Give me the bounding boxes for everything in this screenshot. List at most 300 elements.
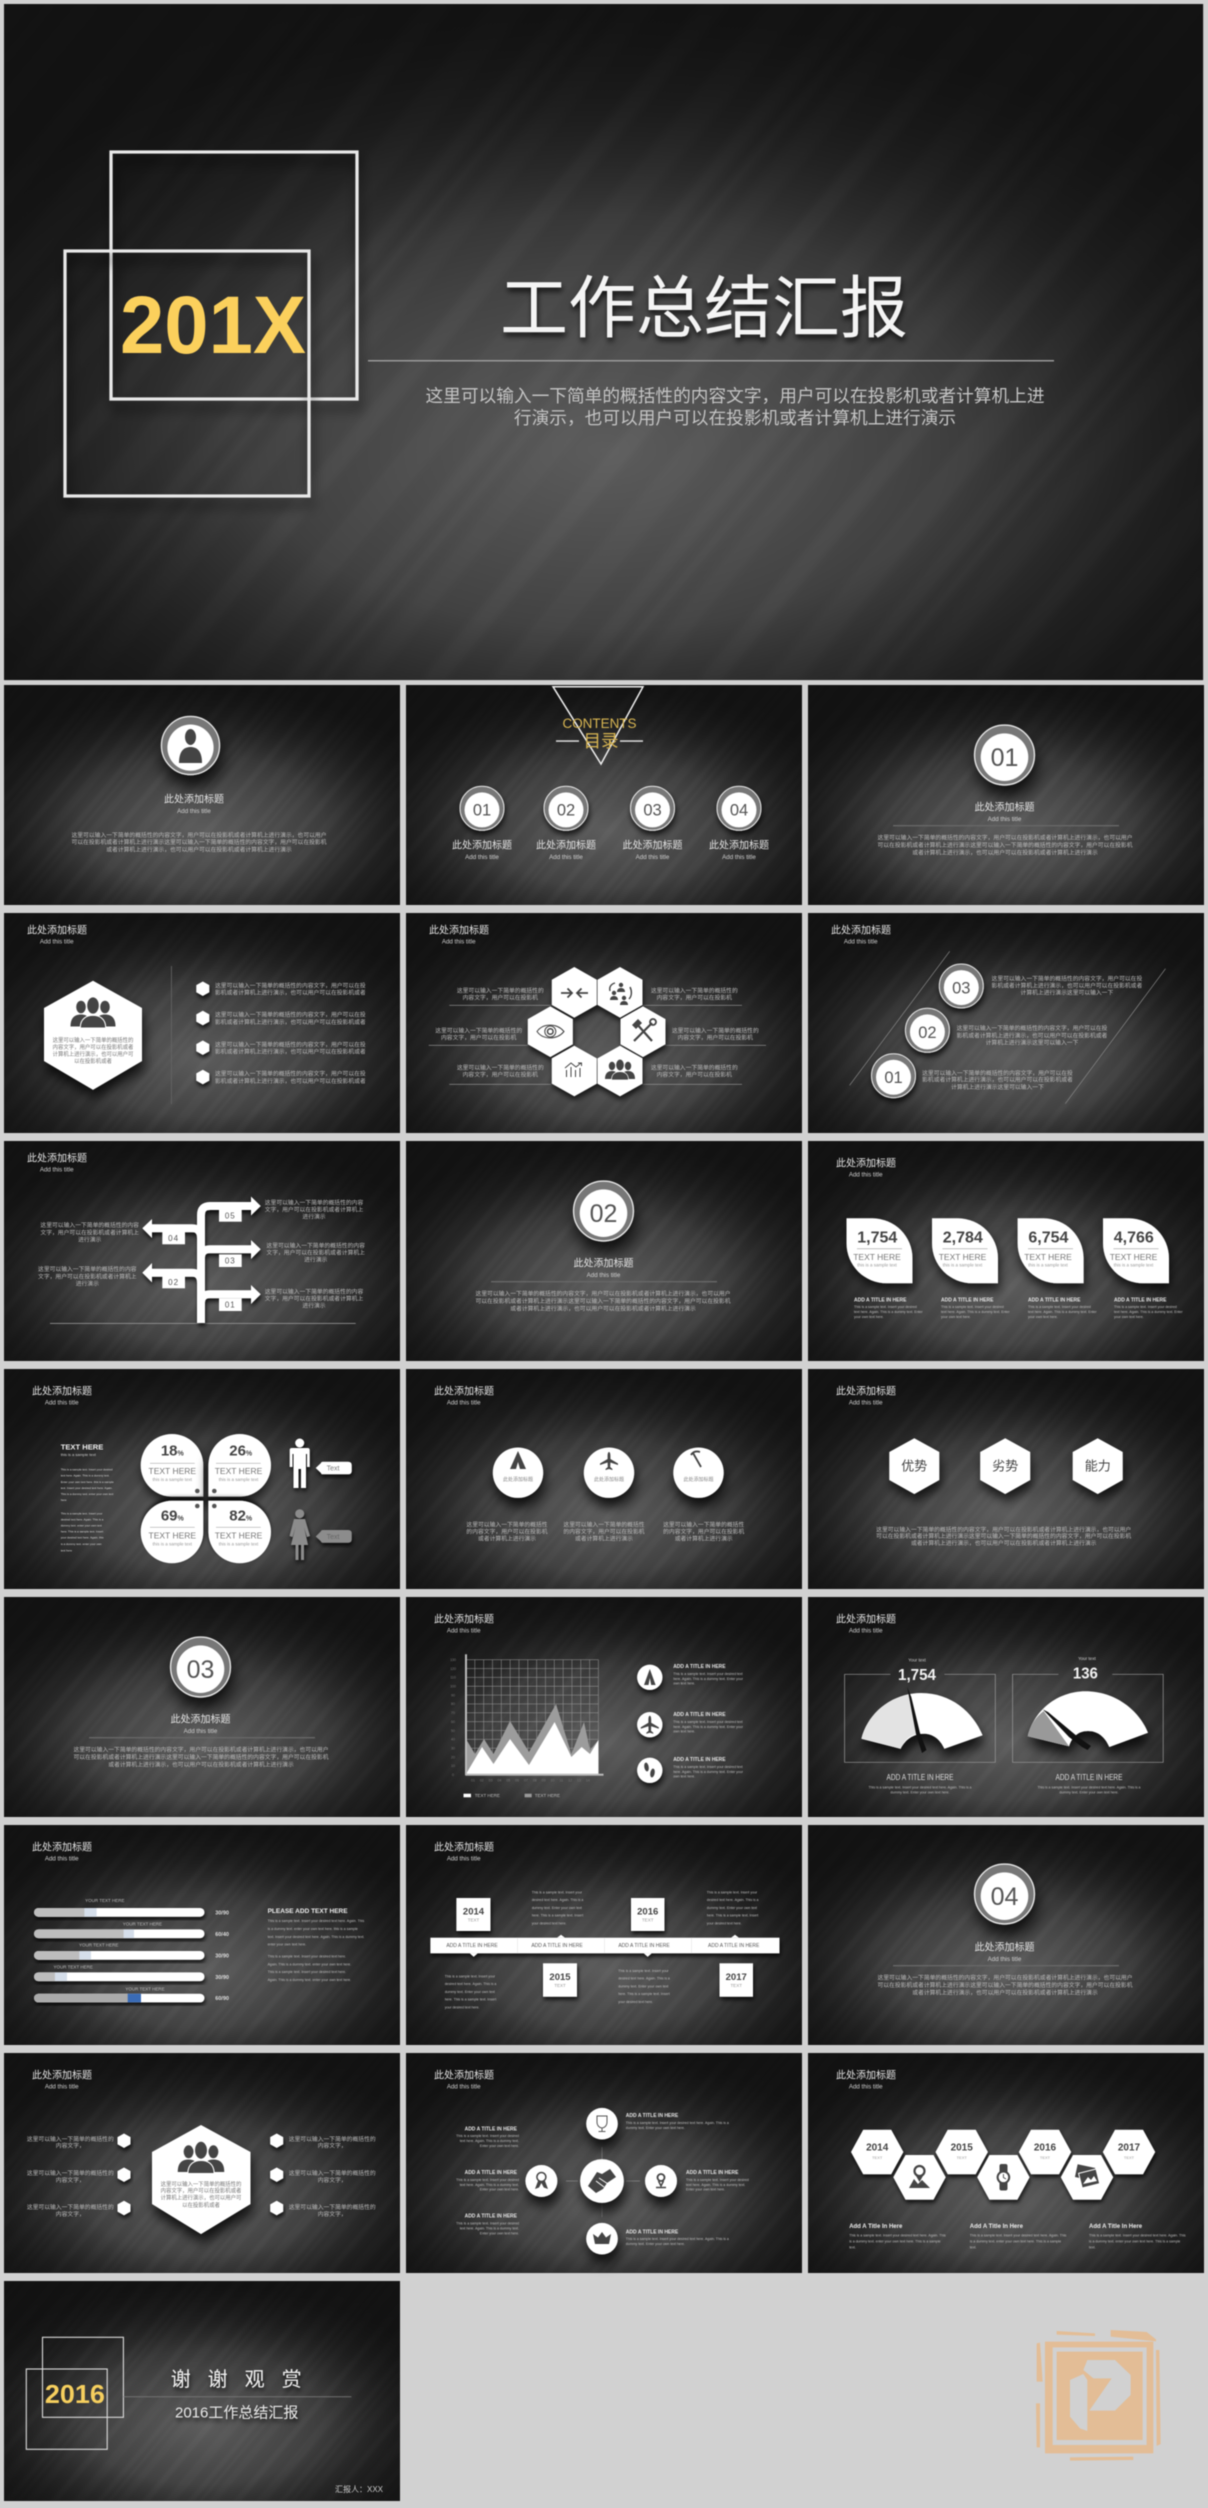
- callout lines: [429, 1005, 766, 1084]
- area chart: 120: [450, 1667, 456, 1671]
- central hexagon: 内容文字，用户可以在投影机或者: [161, 2187, 242, 2195]
- item: plane: [637, 1712, 744, 1737]
- heading: Add this title: [587, 1272, 621, 1279]
- paragraph above segment 4: your desired text here.: [707, 1922, 742, 1926]
- diagonal lines: [850, 951, 1166, 1104]
- area chart: 90: [451, 1693, 455, 1697]
- area chart: 11: [559, 1778, 563, 1782]
- gauge 2 readings: dummy text. Enter your own text here.: [1059, 1790, 1119, 1794]
- body text: 可以在投影机或者计算机上进行演示这里可以输入一下简单的概括性的内容文字，用户可以在投影机: [877, 841, 1133, 849]
- captions: This is a sample text. Insert your desired: [941, 1305, 1004, 1309]
- bar 1: [34, 1898, 229, 1917]
- hexagon 2016: 2016: [1034, 2142, 1057, 2154]
- body text: 或者计算机上进行演示，也可以用户可以在投影机或者计算机上进行演示: [106, 846, 292, 854]
- background: [4, 1141, 400, 1361]
- rule: [491, 1281, 717, 1282]
- petal 69%: 69%: [161, 1508, 185, 1524]
- item 02: [536, 786, 596, 861]
- text left lower: This is a sample text. Insert your desired: [456, 2221, 519, 2225]
- bubble: woman: Text: [327, 1534, 339, 1541]
- text 03: [266, 1242, 365, 1264]
- point 4: [196, 1070, 366, 1085]
- stat 4766: TEXT HERE: [1110, 1252, 1158, 1262]
- petal 26%: [208, 1434, 271, 1497]
- heading: Add this title: [849, 2084, 883, 2090]
- stat 6754: TEXT HERE: [1024, 1252, 1072, 1262]
- captions: ADD A TITLE IN HERE: [1028, 1298, 1081, 1304]
- hexagon 2014: 2014: [866, 2142, 889, 2154]
- background: [406, 913, 802, 1133]
- text columns: 或者计算机上进行演示: [675, 1535, 733, 1543]
- left text: dummy text. enter your own text: [61, 1524, 102, 1528]
- icon: people: [605, 1059, 635, 1080]
- label 04: [162, 1232, 185, 1244]
- item 02: 02: [557, 802, 575, 820]
- card 2016: TEXT: [642, 1918, 654, 1922]
- text 04: 这里可以输入一下简单的概括性的内容: [40, 1221, 139, 1229]
- circle: plane: [584, 1448, 634, 1498]
- area chart: 80: [451, 1702, 455, 1706]
- slide: timeline: [406, 1825, 802, 2045]
- chart legend: TEXT HERE: [475, 1793, 500, 1798]
- avatar ring: [161, 716, 220, 775]
- gauge 2 readings: Your text: [1078, 1656, 1096, 1661]
- body text: 可以在投影机或者计算机上进行演示这里可以输入一下简单的概括性的内容文字，用户可以在投影机: [73, 1753, 329, 1761]
- item 01: [452, 786, 512, 861]
- card 2015: TEXT: [554, 1983, 566, 1988]
- stat 2784: 2,784: [943, 1230, 983, 1246]
- watermark stamp: [1036, 2330, 1161, 2461]
- paragraph below segment 1: your desired text here.: [445, 2006, 480, 2010]
- paragraph above segment 2: desired text here. Again. This is a: [532, 1898, 583, 1902]
- icon: tools: [632, 1019, 656, 1041]
- frames and year: 2016: [45, 2379, 105, 2409]
- right text: Again. This is a dummy text. enter your own text here.: [268, 1978, 351, 1982]
- left text: here: [61, 1498, 67, 1502]
- column text 2: Add A Title In Here: [970, 2224, 1024, 2230]
- bar 3: [34, 1943, 229, 1960]
- petal 82%: TEXT HERE: [215, 1531, 263, 1541]
- heading: [32, 2068, 92, 2090]
- card 2017: 2017: [726, 1972, 747, 1983]
- circle: tent: [493, 1448, 543, 1498]
- captions: your own text here.: [941, 1315, 971, 1319]
- area chart: 100: [450, 1684, 456, 1688]
- text 02: [38, 1265, 137, 1287]
- bar 4: 30/90: [215, 1975, 229, 1981]
- paragraph above segment 4: This is a sample text. Insert your: [707, 1890, 758, 1894]
- text 03: 这里可以输入一下简单的概括性的内容: [266, 1242, 365, 1250]
- stat 2784: TEXT HERE: [939, 1252, 987, 1262]
- item: tent: here. Again. This is a dummy text. Enter your: [673, 1677, 744, 1681]
- item: tent: [637, 1664, 744, 1690]
- gauge 2 readings: This is a sample text. Insert your desired text here. Again. This is a: [1037, 1785, 1141, 1789]
- item: footprints: [637, 1757, 744, 1783]
- paragraph above segment 4: [707, 1890, 759, 1926]
- icon: eye: [537, 1025, 564, 1038]
- captions: text here. Again. This is a dummy text. Enter: [1114, 1310, 1183, 1314]
- background: [808, 1369, 1204, 1589]
- heading: 此处添加标题: [164, 792, 224, 806]
- step 02: 影机或者计算机上进行演示，也可以用户可以在投影机或者: [957, 1031, 1108, 1039]
- background: [406, 2053, 802, 2273]
- hexagon: advantage: 优势: [901, 1458, 927, 1474]
- captions: This is a sample text. Insert your desired: [1028, 1305, 1091, 1309]
- number ring: [975, 1864, 1034, 1924]
- hexagon 2016: [1019, 2130, 1071, 2174]
- area chart: 03: [489, 1778, 493, 1782]
- background: [406, 1141, 802, 1361]
- stat 6754: this is a sample text: [1028, 1262, 1069, 1267]
- background: [406, 1825, 802, 2045]
- heading: [434, 1612, 494, 1634]
- heading: [434, 1840, 494, 1862]
- heading: 此处添加标题: [974, 1940, 1034, 1954]
- slide: radial hub: [406, 2053, 802, 2273]
- hexagon: map pin: [893, 2155, 946, 2200]
- right text: is a dummy text. enter your own text here. this is a sample: [268, 1927, 358, 1931]
- frames and year: 201X: [120, 280, 306, 371]
- card 2015: 2015: [549, 1972, 571, 1983]
- paragraph above segment 2: here. This is a sample text. Insert: [532, 1914, 583, 1918]
- body text: 这里可以输入一下简单的概括性的内容文字，用户可以在投影机或者计算机上进行演示，也可以用户: [73, 1745, 329, 1753]
- background: [808, 685, 1204, 905]
- body text: [475, 1289, 731, 1312]
- left text: TEXT HERE: [61, 1442, 103, 1451]
- text right: Enter your own text here.: [686, 2188, 725, 2192]
- background: [406, 685, 802, 905]
- contents heading: CONTENTS: [562, 716, 636, 731]
- heading: [974, 800, 1034, 823]
- background: [4, 1597, 400, 1817]
- point 4: 这里可以输入一下简单的概括性的内容文字，用户可以在投: [215, 1070, 366, 1078]
- right text: This is a sample text. Insert your desired text here.: [268, 1954, 346, 1958]
- area chart: 13: [577, 1778, 581, 1782]
- item 04: 04: [730, 802, 748, 820]
- hexagon: ability: [1073, 1438, 1123, 1494]
- heading: [170, 1712, 230, 1735]
- text right: ADD A TITLE IN HERE: [686, 2170, 739, 2176]
- text 05: 进行演示: [302, 1213, 326, 1221]
- background: [808, 1141, 1204, 1361]
- stat 1754: TEXT HERE: [853, 1252, 901, 1262]
- item: footprints: own text here.: [673, 1774, 695, 1778]
- hexagon: photos: [1061, 2155, 1113, 2200]
- number ring: [574, 1181, 633, 1241]
- petal 18%: this is a sample text: [153, 1477, 193, 1482]
- text left: 这里可以输入一下简单的概括性的: [27, 2203, 114, 2211]
- hexagon 2016: TEXT: [1040, 2155, 1051, 2160]
- step 02: [905, 1008, 1108, 1052]
- text columns: 的内容文字，用户可以在投影机: [563, 1528, 645, 1536]
- text left upper: text here. Again. This is a dummy text.: [460, 2139, 519, 2143]
- step 03: 03: [952, 980, 970, 998]
- cover subtitle: 这里可以输入一下简单的概括性的内容文字，用户可以在投影机或者计算机上进: [425, 386, 1045, 406]
- text 02: 文字，用户可以在投影机或者计算机上: [38, 1272, 137, 1280]
- heading: [836, 1612, 896, 1634]
- heading: Add this title: [849, 1172, 883, 1178]
- petal 69%: this is a sample text: [153, 1542, 193, 1546]
- bubble: woman: [316, 1530, 352, 1543]
- heading: 此处添加标题: [170, 1712, 230, 1726]
- text left middle: 这里可以输入一下简单的概括性的: [435, 1026, 522, 1034]
- background: [406, 1369, 802, 1589]
- area chart: 12: [568, 1778, 572, 1782]
- body text: 可以在投影机或者计算机上进行演示这里可以输入一下简单的概括性的内容文字，用户可以在投影机: [475, 1297, 731, 1305]
- bubble: man: [316, 1462, 352, 1474]
- text 04: 文字，用户可以在投影机或者计算机上: [40, 1228, 139, 1236]
- heading: [836, 2068, 896, 2090]
- hexagon 2017: 2017: [1118, 2142, 1141, 2154]
- text right bottom: [651, 1063, 738, 1078]
- label 02: 02: [168, 1278, 179, 1287]
- heading: Add this title: [45, 2084, 79, 2090]
- bar 5: [34, 1986, 229, 2002]
- reporter: 汇报人：XXX: [335, 2484, 384, 2494]
- body text: 可以在投影机或者计算机上进行演示这里可以输入一下简单的概括性的内容文字，用户可以在投影机: [876, 1532, 1131, 1540]
- cover title: 工作总结汇报: [500, 271, 908, 347]
- left text: Enter your own text here. this is a sample: [61, 1480, 114, 1484]
- number ring: 02: [590, 1200, 617, 1228]
- point 3: 影机或者计算机上进行演示，也可以用户可以在投影机或者: [215, 1048, 366, 1056]
- paragraph above segment 2: your desired text here.: [532, 1922, 567, 1926]
- stat 1754: [846, 1218, 912, 1283]
- rule: [123, 2395, 351, 2398]
- area chart: 50: [451, 1729, 455, 1733]
- heading: Add this title: [45, 1856, 79, 1862]
- right text: text. Insert your desired text here. Again. This is a dummy text.: [268, 1935, 364, 1939]
- step 03: 计算机上进行演示这里可以输入一下: [1021, 989, 1113, 997]
- timeline strip: ADD A TITLE IN HERE: [618, 1943, 670, 1949]
- circle: plane: 此处添加标题: [594, 1476, 624, 1483]
- slide: cover: [4, 4, 1203, 680]
- point 1: [196, 981, 366, 997]
- slide: thank you: [4, 2281, 400, 2501]
- heading: Add this title: [447, 1856, 481, 1862]
- text bottom: [626, 2229, 729, 2246]
- heading: 此处添加标题: [429, 924, 489, 936]
- base line: [50, 1322, 356, 1325]
- heading: 此处添加标题: [836, 2068, 896, 2082]
- text columns: 或者计算机上进行演示: [575, 1535, 633, 1543]
- column text 2: is a dummy text. enter your own text here. This is a sample: [970, 2240, 1061, 2244]
- heading: [27, 924, 87, 946]
- area chart: 60: [451, 1720, 455, 1724]
- petal 82%: [208, 1501, 271, 1563]
- stat 6754: 6,754: [1028, 1230, 1069, 1246]
- body text: [877, 833, 1133, 856]
- petal 69%: [141, 1501, 203, 1563]
- left text: is a dummy text. enter your own: [61, 1542, 102, 1546]
- timeline strip: ADD A TITLE IN HERE: [446, 1943, 498, 1949]
- hexagon: ability: 能力: [1085, 1458, 1111, 1474]
- heading: 此处添加标题: [434, 1612, 494, 1626]
- bubble: man: Text: [327, 1466, 339, 1472]
- body text: 或者计算机上进行演示，也可以用户可以在投影机或者计算机上进行演示: [510, 1304, 696, 1312]
- number ring: 04: [991, 1883, 1018, 1911]
- bar 4: [34, 1965, 229, 1981]
- text left middle: Enter your own text here.: [480, 2188, 519, 2192]
- stat 4766: [1103, 1218, 1169, 1283]
- item 01: 此处添加标题: [452, 838, 512, 852]
- heading: 此处添加标题: [974, 800, 1034, 814]
- left text: text here: [61, 1548, 72, 1552]
- area chart: 70: [451, 1711, 455, 1715]
- text left middle: text here. Again. This is a dummy text.: [460, 2183, 519, 2187]
- item: footprints: here. Again. This is a dummy text. Enter your: [673, 1770, 744, 1774]
- left text: text. Insert your desired text here. Again.: [61, 1486, 113, 1490]
- timeline strip: ADD A TITLE IN HERE: [531, 1943, 583, 1949]
- item: footprints: This is a sample text. Insert your desired text: [673, 1765, 743, 1769]
- text left upper: This is a sample text. Insert your desired: [456, 2134, 519, 2138]
- text left top: 内容文字，用户可以在投影机: [463, 994, 538, 1002]
- text left lower: text here. Again. This is a dummy text.: [460, 2226, 519, 2230]
- paragraph below segment 3: dummy text. Enter your own text: [618, 1984, 668, 1988]
- left text: desired text here. Again. This is a: [61, 1518, 104, 1522]
- cover subtitle: 行演示，也可以用户可以在投影机或者计算机上进行演示: [514, 408, 956, 428]
- heading: Add this title: [988, 816, 1022, 823]
- heading: 此处添加标题: [434, 2068, 494, 2082]
- petal 26%: 26%: [229, 1442, 253, 1460]
- item: plane: here. Again. This is a dummy text. Enter your: [673, 1725, 744, 1729]
- paragraph below segment 3: [618, 1969, 670, 2004]
- small hexagons right: [270, 2134, 283, 2215]
- background: [4, 1369, 400, 1589]
- text right: 这里可以输入一下简单的概括性的: [289, 2203, 376, 2211]
- area chart: 06: [515, 1778, 519, 1782]
- card 2014: 2014: [463, 1906, 485, 1918]
- stat 4766: this is a sample text: [1114, 1262, 1154, 1267]
- paragraph above segment 4: here. This is a sample text. Insert: [707, 1914, 758, 1918]
- paragraph above segment 2: dummy text. Enter your own text: [532, 1906, 582, 1910]
- text top: This is a sample text. Insert your desired text here. Again. This is a: [626, 2121, 729, 2125]
- gauge 1 readings: 1,754: [898, 1667, 936, 1684]
- gauge frame 2: [1013, 1674, 1163, 1762]
- card 2014: [456, 1898, 490, 1931]
- column text 2: This is a sample text. Insert your desired text here. Again. This: [970, 2234, 1067, 2238]
- slide: gauges: [808, 1597, 1204, 1817]
- captions: This is a sample text. Insert your desired: [1114, 1305, 1177, 1309]
- hexagon 2015: [936, 2130, 988, 2174]
- heading: 此处添加标题: [32, 2068, 92, 2082]
- right text: Again. This is a dummy text. enter your own text here.: [268, 1962, 351, 1966]
- step 01: 01: [884, 1069, 903, 1087]
- item 02: 此处添加标题: [536, 838, 596, 852]
- number ring: [171, 1637, 230, 1697]
- heading: Add this title: [849, 1400, 883, 1406]
- heading: Add this title: [844, 938, 878, 946]
- item 04: [709, 786, 769, 861]
- heading: Add this title: [988, 1956, 1022, 1963]
- heading: 此处添加标题: [27, 1152, 87, 1164]
- column text 1: text.: [849, 2246, 856, 2250]
- step 03: [939, 964, 1142, 1008]
- petal 82%: this is a sample text: [219, 1542, 259, 1546]
- body text: 可以在投影机或者计算机上进行演示这里可以输入一下简单的概括性的内容文字，用户可以在投影机: [877, 1981, 1133, 1989]
- big hexagon: 以在投影机或者: [74, 1057, 112, 1065]
- label 01: 01: [225, 1301, 236, 1310]
- slide: contents: [406, 685, 802, 905]
- text right: text here. Again. This is a dummy text.: [686, 2183, 745, 2187]
- hexagon 2014: [851, 2130, 903, 2174]
- text left bottom: 这里可以输入一下简单的概括性的: [457, 1063, 544, 1071]
- captions: ADD A TITLE IN HERE: [941, 1298, 994, 1304]
- heading: Add this title: [447, 2084, 481, 2090]
- background: [808, 1825, 1204, 2045]
- slide: branching arrows: [4, 1141, 400, 1361]
- step 02: 计算机上进行演示这里可以输入一下: [986, 1038, 1079, 1046]
- point 3: 这里可以输入一下简单的概括性的内容文字，用户可以在投: [215, 1040, 366, 1048]
- text columns: 或者计算机上进行演示: [478, 1535, 536, 1543]
- bar 2: [34, 1922, 229, 1938]
- cover rule: [368, 360, 1054, 362]
- node: crown: [586, 2223, 618, 2254]
- text bottom: ADD A TITLE IN HERE: [626, 2229, 679, 2235]
- captions: text here. Again. This is a dummy text. Enter: [1028, 1310, 1097, 1314]
- item 01: 01: [473, 802, 491, 820]
- timeline strip: [430, 1935, 780, 1957]
- bar 1: YOUR TEXT HERE: [85, 1898, 124, 1903]
- heading: Add this title: [447, 1400, 481, 1406]
- central hexagon: 这里可以输入一下简单的概括性的: [161, 2180, 241, 2188]
- card 2014: TEXT: [468, 1918, 479, 1922]
- text left: 这里可以输入一下简单的概括性的: [27, 2169, 114, 2177]
- step 01: 计算机上进行演示这里可以输入一下: [951, 1083, 1044, 1091]
- heading: 此处添加标题: [32, 1384, 92, 1398]
- heading: [836, 1156, 896, 1178]
- card 2015: [543, 1963, 577, 1997]
- heading: Add this title: [45, 1400, 79, 1406]
- area chart: 05: [506, 1778, 510, 1782]
- text 03: 文字，用户可以在投影机或者计算机上: [266, 1249, 365, 1257]
- body text: 或者计算机上进行演示，也可以用户可以在投影机或者计算机上进行演示: [911, 1539, 1097, 1547]
- area chart: 110: [450, 1676, 456, 1680]
- left text: your desired text here. Again. this: [61, 1536, 104, 1540]
- text columns: [466, 1520, 744, 1543]
- heading: 此处添加标题: [27, 924, 87, 936]
- body text: 这里可以输入一下简单的概括性的内容文字，用户可以在投影机或者计算机上进行演示，也可以用户: [877, 1973, 1133, 1981]
- slide: six hexagons: [406, 913, 802, 1133]
- paragraph above segment 2: This is a sample text. Insert your: [532, 1890, 583, 1894]
- slide: four stat leaves: [808, 1141, 1204, 1361]
- text bottom: dummy text. Enter your own text here.: [626, 2242, 685, 2246]
- heading: Add this title: [849, 1628, 883, 1634]
- step 01: 影机或者计算机上进行演示，也可以用户可以在投影机或者: [922, 1076, 1073, 1084]
- node: ribbon: [525, 2165, 557, 2197]
- column text 3: text.: [1089, 2246, 1096, 2250]
- text left lower: ADD A TITLE IN HERE: [465, 2213, 518, 2219]
- body text: 或者计算机上进行演示，也可以用户可以在投影机或者计算机上进行演示: [912, 848, 1098, 856]
- right text: enter your own text here.: [268, 1942, 306, 1946]
- frames and year: [65, 152, 357, 496]
- point 3: [196, 1040, 366, 1056]
- text right: 这里可以输入一下简单的概括性的: [289, 2169, 376, 2177]
- heading: 此处添加标题: [434, 1840, 494, 1854]
- frames and year: [26, 2337, 123, 2449]
- text right middle: 这里可以输入一下简单的概括性的: [672, 1026, 759, 1034]
- text right top: [651, 986, 738, 1002]
- hexagon: disadvantage: [980, 1438, 1030, 1494]
- text top: ADD A TITLE IN HERE: [626, 2113, 679, 2119]
- point 2: 影机或者计算机上进行演示，也可以用户可以在投影机或者: [215, 1018, 366, 1026]
- slide: section 04: [808, 1825, 1204, 2045]
- slide: section 03: [4, 1597, 400, 1817]
- text left upper: [456, 2126, 519, 2148]
- bar 2: YOUR TEXT HERE: [123, 1922, 162, 1927]
- label 04: 04: [168, 1234, 179, 1243]
- body text: [73, 1745, 329, 1768]
- point 2: [196, 1011, 366, 1026]
